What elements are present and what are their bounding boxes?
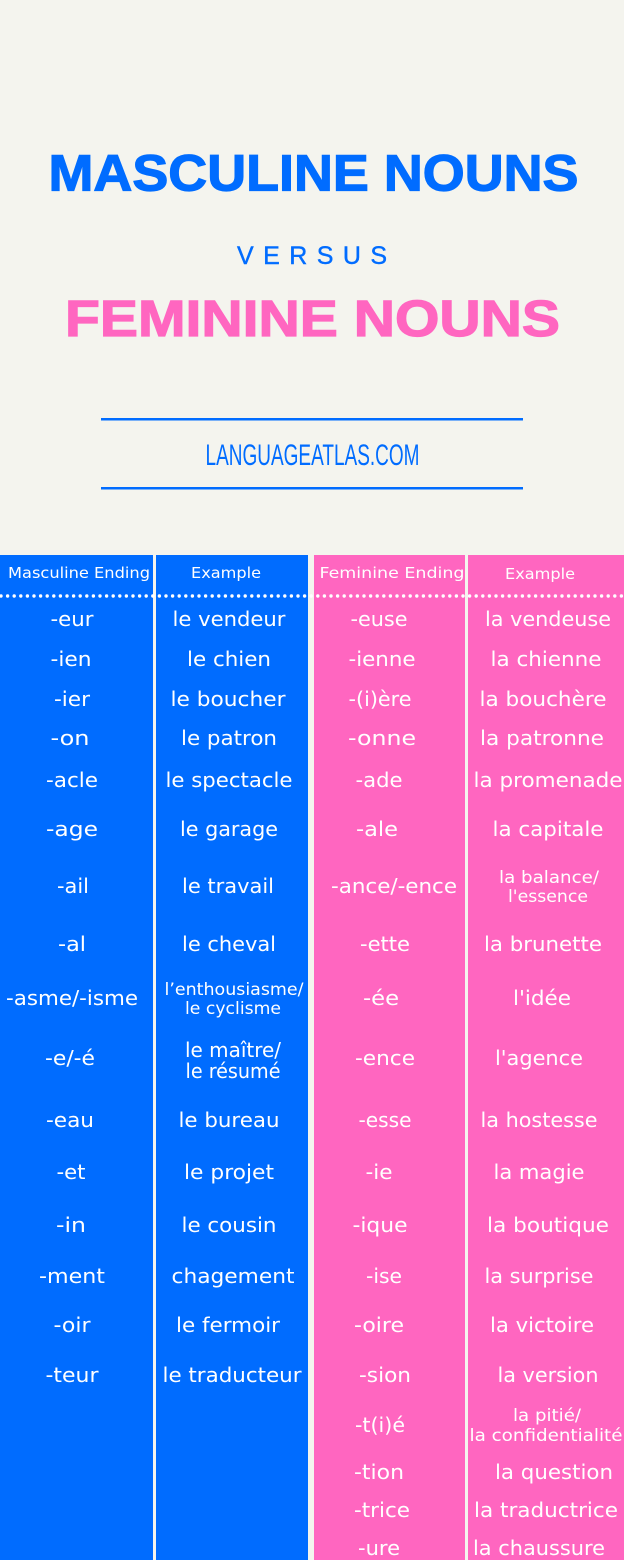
panel: masculine endings [0,555,153,1560]
feminine ending list: -ie [366,1160,392,1184]
masculine ending list: -et [56,1160,86,1184]
masculine example list: le résumé [186,1059,280,1083]
feminine example list: l'idée [513,986,571,1010]
masculine ending list [6,607,138,1387]
feminine ending list: -ienne [348,647,416,671]
masculine example list: le boucher [170,687,286,711]
panel: feminine examples [468,555,624,1560]
masculine ending list: -eau [46,1108,94,1132]
feminine example list: la promenade [474,768,622,792]
masculine ending list: -al [58,932,86,956]
feminine example list: l'essence [508,887,588,907]
masculine ending list: -in [56,1213,86,1237]
feminine ending list: -oire [354,1313,404,1337]
feminine example list: la version [498,1363,598,1387]
feminine ending list: -ique [352,1213,408,1237]
feminine example list: la question [495,1460,613,1484]
header: example: Example [191,564,261,582]
header: example: Example [505,565,575,583]
masculine example list: le cousin [182,1213,276,1237]
feminine example list: la confidentialité [470,1426,622,1446]
feminine ending list: -(i)ère [348,687,412,711]
masculine ending list: -ment [39,1264,105,1288]
feminine example list: la balance/ [499,868,599,888]
feminine ending list: -ence [355,1046,415,1070]
feminine ending list: -onne [348,726,416,750]
masculine ending list: -e/-é [45,1046,95,1070]
feminine ending list: -esse [358,1108,412,1132]
masculine ending list: -ier [54,687,91,711]
masculine example list: le traducteur [162,1363,302,1387]
feminine example list: la patronne [480,726,604,750]
panel: feminine endings [314,555,465,1560]
feminine example list: la vendeuse [485,607,611,631]
title: masculine nouns: MASCULINE NOUNS [48,144,578,202]
feminine example list: la brunette [484,932,602,956]
panel: masculine examples [156,555,308,1560]
masculine example list: le bureau [178,1108,280,1132]
feminine ending list: -euse [350,607,408,631]
masculine ending list: -teur [46,1363,99,1387]
masculine ending list: -oir [54,1313,91,1337]
feminine example list: la pitié/ [513,1406,581,1426]
masculine example list [162,607,304,1387]
masculine ending list: -asme/-isme [6,986,138,1010]
subtitle: versus: VERSUS [237,242,387,270]
website: LANGUAGEATLAS.COM [206,439,420,472]
feminine example list: la hostesse [480,1108,598,1132]
masculine ending list: -ail [57,874,89,898]
header: masculine ending: Masculine Ending [8,564,150,582]
feminine example list: la surprise [484,1264,594,1288]
feminine ending list: -trice [354,1498,410,1522]
masculine ending list: -age [46,817,98,841]
header: feminine ending: Feminine Ending [320,564,464,582]
masculine ending list: -acle [46,768,98,792]
feminine ending list: -ise [366,1264,402,1288]
feminine example list: la chaussure [473,1536,605,1560]
masculine example list: le travail [182,874,274,898]
feminine ending list: -sion [359,1363,411,1387]
feminine example list: la chienne [490,647,602,671]
feminine ending list: -t(i)é [355,1413,405,1437]
title: feminine nouns: FEMININE NOUNS [65,290,560,347]
feminine example list: la victoire [490,1313,594,1337]
feminine example list: la capitale [492,817,604,841]
feminine ending list: -tion [354,1460,404,1484]
feminine example list: la bouchère [480,687,606,711]
feminine example list: l'agence [495,1046,583,1070]
masculine example list: le cheval [182,932,276,956]
feminine ending list: -ure [358,1536,400,1560]
feminine ending list: -ale [356,817,398,841]
masculine example list: le vendeur [172,607,286,631]
feminine ending list: -ée [363,986,399,1010]
masculine example list: l’enthousiasme/ [164,980,304,1000]
masculine ending list: -on [50,726,90,750]
masculine example list: le cyclisme [185,999,281,1019]
masculine example list: le maître/ [185,1038,281,1062]
masculine example list: le garage [180,817,278,841]
masculine ending list: -ien [50,647,92,671]
feminine ending list [331,607,457,1560]
masculine example list: le spectacle [166,768,292,792]
feminine example list: la traductrice [474,1498,618,1522]
feminine example list [470,607,622,1560]
feminine ending list: -ade [356,768,402,792]
masculine example list: le chien [187,647,271,671]
masculine example list: le projet [184,1160,274,1184]
masculine example list: chagement [172,1264,294,1288]
masculine ending list: -eur [50,607,94,631]
feminine ending list: -ette [360,932,410,956]
feminine ending list: -ance/-ence [331,874,457,898]
feminine example list: la boutique [487,1213,609,1237]
masculine example list: le fermoir [176,1313,281,1337]
masculine example list: le patron [181,726,277,750]
rule above website [101,418,523,420]
feminine example list: la magie [494,1160,584,1184]
rule below website [101,487,523,490]
